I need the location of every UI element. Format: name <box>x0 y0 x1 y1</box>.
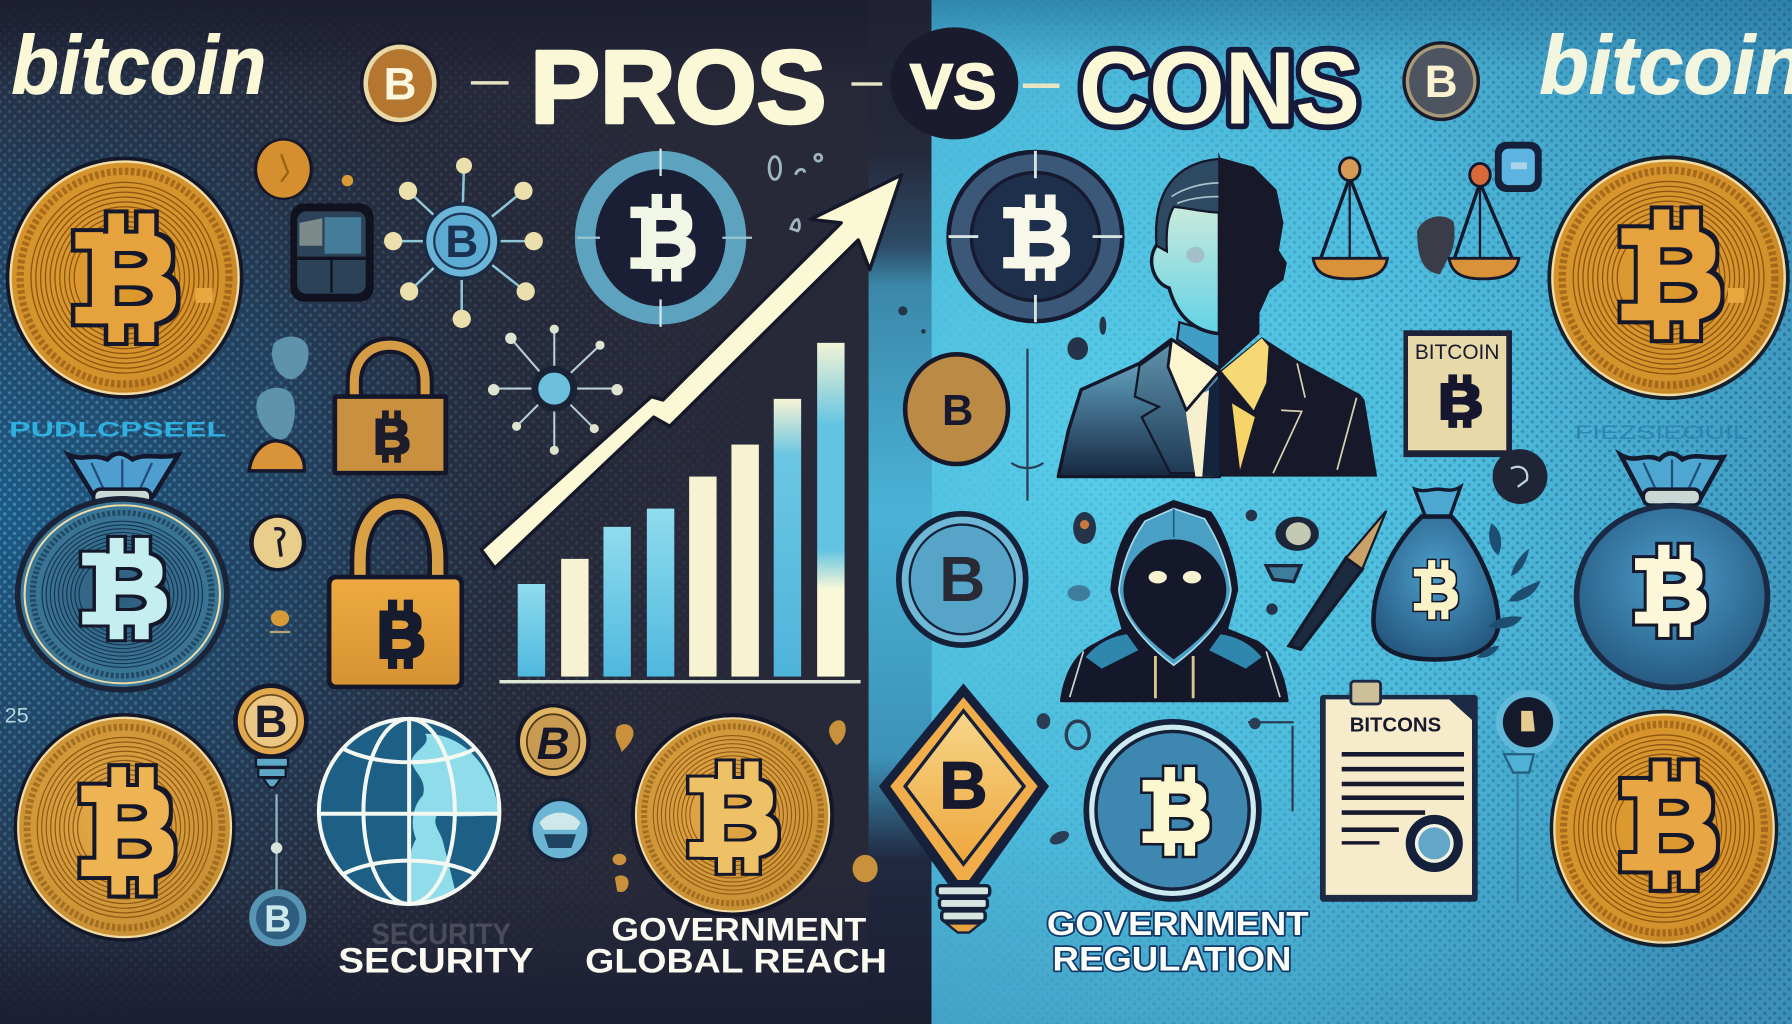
icon: blue coin large: B <box>1149 765 1212 860</box>
icon: small blue coin: B <box>264 897 291 939</box>
header: dashes <box>471 81 1059 88</box>
icon: cream token <box>249 514 306 571</box>
header: cons title: CONS <box>1079 30 1360 145</box>
label: security: SECURITY <box>338 941 534 981</box>
coin: large gold lower left: B <box>90 763 177 900</box>
icon: regulation document: BITCONS <box>1350 713 1441 736</box>
coin: gold coin centre <box>631 713 834 917</box>
icon: blue coin mid: B <box>939 543 985 615</box>
icon: coin bulb <box>233 683 309 895</box>
icon: small blue coin <box>249 889 306 946</box>
coin: large gold lower left <box>14 713 235 942</box>
label: government regulation: GOVERNMENT <box>1047 906 1309 943</box>
number label: 25 <box>5 702 29 727</box>
icon: blue helmet token <box>528 798 592 862</box>
icon: dark ring badge right <box>946 150 1125 323</box>
bar chart <box>499 343 861 683</box>
icon: dark blob <box>1417 216 1455 274</box>
header: vs badge <box>890 27 1018 139</box>
label: ghost security: SECURITY <box>371 918 511 951</box>
coin: large gold lower right: B <box>1631 758 1720 895</box>
icon: network node lower <box>488 325 623 455</box>
label: government global reach: GLOBAL REACH <box>585 943 887 981</box>
icon: dark wallet <box>290 203 374 302</box>
background: cyan cons side <box>869 0 1792 1024</box>
icon: blue coin mid <box>896 511 1029 648</box>
icon: globe <box>318 718 501 905</box>
icon: money bag left: B <box>91 535 170 645</box>
garbled caption left: PUDLCPSEEL <box>9 417 226 442</box>
coin: large gold lower right <box>1550 710 1778 947</box>
icon: small padlock: B <box>373 408 411 465</box>
label: government global reach: GOVERNMENT <box>611 912 867 948</box>
icon: large padlock <box>327 504 464 689</box>
small dark marks <box>1037 713 1294 847</box>
icon: ring bitcoin badge: B <box>637 190 698 285</box>
background: dark pros side <box>0 23 868 1000</box>
icon: coin bulb: B <box>254 696 287 747</box>
header: vs badge: VS <box>910 51 997 123</box>
icon: orange blob <box>249 441 304 471</box>
icon: scales left <box>1313 158 1387 279</box>
small dark specks <box>898 306 1319 615</box>
header: small coin left: B <box>383 58 417 109</box>
icon: money bag right: B <box>1642 543 1709 642</box>
label: government regulation <box>1047 906 1309 978</box>
icon: small pins <box>613 720 878 892</box>
icon: small padlock <box>333 345 448 475</box>
icon: bitcoin poster: B <box>1438 373 1483 431</box>
icon: regulation document <box>1320 681 1478 902</box>
label: government global reach <box>585 912 887 981</box>
icon: dark ring badge right: B <box>1010 192 1073 286</box>
icon: scales right <box>1449 163 1519 279</box>
figure: hooded hacker <box>1062 502 1287 701</box>
icon: rounded phone <box>1495 142 1542 192</box>
icon: network node top <box>384 158 543 328</box>
icon: ring bitcoin badge <box>575 149 752 327</box>
header: bitcoin wordmark left: bitcoin <box>11 21 266 112</box>
label: government regulation: REGULATION <box>1053 940 1291 978</box>
icon: blue blob <box>256 337 309 440</box>
icon: brown coin and hook: B <box>942 387 973 435</box>
icon: brown coin and hook <box>903 349 1043 501</box>
coin: large gold top left: B <box>85 209 180 349</box>
icon: money bag left <box>15 453 230 693</box>
coin: large gold top right: B <box>1631 206 1724 346</box>
icon: blue pin coin <box>1496 690 1560 903</box>
icon: money bag with laurel <box>1374 487 1541 659</box>
coin: large gold top left <box>6 157 243 399</box>
icon: money bag with laurel: B <box>1418 559 1459 623</box>
icon: large padlock: B <box>376 599 426 672</box>
header: small coin right <box>1402 41 1480 121</box>
header: small coin left <box>360 41 440 126</box>
icon: network node top: B <box>445 216 478 267</box>
icon: warning sign bulb: B <box>939 749 987 823</box>
arrow: growth trend <box>481 175 902 568</box>
caption blurred right: FIEZSIEOUIL <box>1575 422 1749 444</box>
coin: gold coin centre: B <box>698 758 781 878</box>
icon: gold coin small: B <box>537 718 570 769</box>
figure: split businessman <box>1058 152 1377 477</box>
header: small coin right: B <box>1425 56 1458 107</box>
icon: small orange coin <box>254 138 313 200</box>
coin: large gold top right <box>1547 155 1790 400</box>
icon: gold coin small <box>515 704 591 779</box>
header: pros title: PROS <box>530 29 826 144</box>
icon: blue coin large <box>1083 719 1262 902</box>
icon: money bag right <box>1574 453 1770 690</box>
icon: bitcoin poster: BITCOIN <box>1415 339 1499 364</box>
icon: dark token <box>1493 449 1547 504</box>
icon: warning sign bulb <box>879 683 1049 933</box>
small decorative glyphs near arrow <box>769 154 822 231</box>
icon: small orange bits <box>270 175 353 633</box>
icon: bitcoin poster <box>1403 330 1512 457</box>
icon: pen <box>1289 511 1386 649</box>
